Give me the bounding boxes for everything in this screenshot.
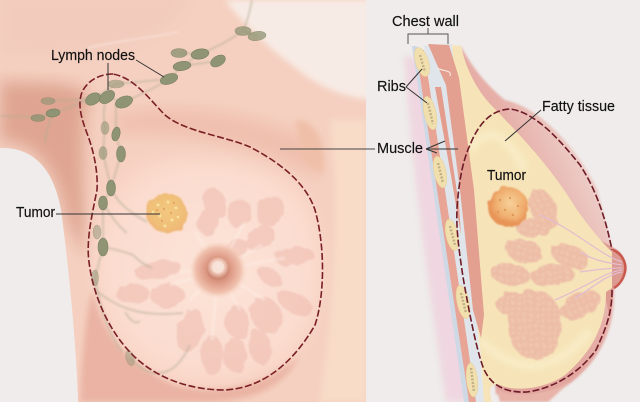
nipple: side view	[613, 250, 625, 288]
lymph nodes	[31, 26, 267, 367]
breast	[92, 158, 322, 384]
ribs	[411, 46, 479, 397]
skin: under-breast fold	[497, 382, 570, 402]
label: tumor: Tumor	[16, 205, 55, 221]
lymph vessels	[0, 0, 257, 373]
muscle: inner layer	[435, 87, 461, 235]
skin: underarm shadow	[0, 80, 90, 260]
skin: nipple tint	[600, 240, 626, 320]
milk ducts to nipple	[540, 215, 622, 300]
dashed outline: front view removal area	[80, 74, 322, 390]
label: chest wall: Chest wall	[392, 14, 459, 30]
skin: chest and shoulder	[0, 0, 366, 402]
panel: front view	[0, 0, 380, 402]
panel: side view	[280, 14, 626, 402]
tumor: side view	[488, 187, 528, 227]
fatty tissue	[452, 45, 612, 402]
skin: breast underside shadow	[80, 290, 300, 402]
label: lymph nodes: Lymph nodes	[51, 48, 135, 64]
ducts: front view	[170, 222, 285, 340]
label: chest wall	[392, 14, 459, 44]
nipple and areola	[189, 241, 247, 299]
label: muscle: Muscle	[377, 141, 423, 157]
dashed outline: side view removal area	[457, 109, 612, 392]
skin band: side view	[461, 46, 626, 396]
white cutout edge under the arm	[0, 148, 78, 402]
label: muscle	[280, 141, 458, 157]
lobes: side view	[489, 182, 605, 360]
label: fatty tissue: Fatty tissue	[542, 99, 615, 115]
label: tumor side: Tumor	[487, 168, 526, 184]
label: ribs	[377, 69, 427, 103]
label: lymph nodes	[51, 48, 164, 90]
lobes: front view	[116, 184, 316, 375]
tumor: front view	[147, 193, 187, 233]
muscle: outer layer	[428, 44, 484, 338]
lung lining	[404, 55, 476, 402]
label: ribs: Ribs	[377, 79, 406, 95]
label: fatty tissue	[505, 99, 615, 141]
